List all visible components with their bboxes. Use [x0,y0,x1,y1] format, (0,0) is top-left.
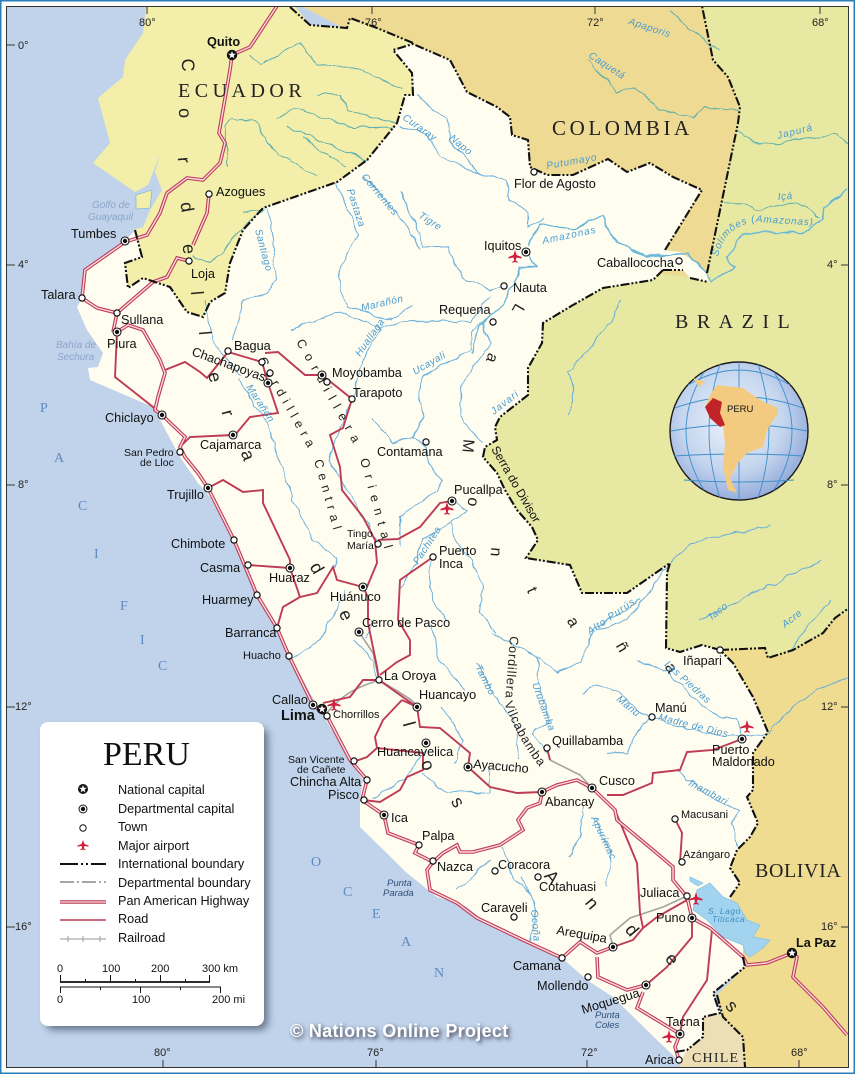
locator globe: PERU [727,404,754,415]
latitude and longitude labels: 80° [139,17,156,29]
city labels: Tacna [666,1015,701,1029]
panel: legend: Major airport [118,839,190,853]
river and gulf labels: Marañón [243,383,276,425]
city labels: Requena [439,303,491,317]
panel: legend: Railroad [118,931,165,945]
city labels: Nauta [513,281,548,295]
city labels: Tingo [347,528,373,540]
city labels: Huarmey [202,593,254,607]
ocean label: Pacific Ocean: I [140,633,145,648]
national capitals [227,50,797,958]
mountain range letters: Cordillera de los Andes: l [187,290,207,296]
city labels: Azángaro [683,849,730,861]
mountain range names: Cordillera Central [262,358,342,530]
panel: legend: National capital [118,783,205,797]
ocean label: Pacific Ocean: E [372,907,381,922]
city labels: Manú [655,701,687,715]
ocean label: Pacific Ocean [40,401,444,981]
ocean label: Pacific Ocean: C [78,499,87,514]
city labels: Tumbes [71,227,116,241]
city labels: Barranca [225,626,277,640]
city labels: Nazca [437,860,474,874]
city labels: de Cañete [297,764,346,776]
airports [328,250,754,1043]
river and gulf labels: Caquetá [586,50,627,82]
legend: scale bar: 0 [57,994,63,1006]
legend shadow [46,728,268,1030]
country names: CHILE [692,1051,739,1066]
river and gulf labels: Solimões (Amazonas) [712,214,812,256]
city labels: La Oroya [384,669,437,683]
river and gulf labels: Apurímac [588,814,618,862]
river and gulf labels: Napo [447,133,474,158]
mountain range letters: Cordillera de los Andes: A [540,866,564,888]
latitude and longitude labels: 12° [15,701,32,713]
latitude and longitude labels: 72° [581,1047,598,1059]
city labels: Lima [281,708,316,724]
city labels: Puerto [439,544,476,558]
river and gulf labels: Ucayali [411,350,448,378]
mountain range letters: La Montana: L [508,301,527,317]
river and gulf labels: Titicaca [712,914,745,924]
river and gulf labels: Curaray [400,112,439,144]
latitude and longitude labels: 16° [821,921,838,933]
panel: legend: Town [118,820,148,834]
city labels: Pisco [328,788,359,802]
river and gulf labels: S. Lago [708,906,741,916]
city labels: Arica [645,1053,675,1067]
mountain range letters: La Montana: a [482,351,501,365]
city labels: Maldonado [712,755,775,769]
ocean label: Pacific Ocean: C [158,659,167,674]
mountain range letters: Cordillera de los Andes: l [195,330,215,336]
mountain range letters: La Montana: o [463,496,482,508]
city labels: Trujillo [167,488,204,502]
mountain range letters: Cordillera de los Andes: e [335,606,357,624]
river and gulf labels: Corrientes [359,172,400,218]
mountain range letters: La Montana: a [563,614,582,630]
mountain range letters: Cordillera de los Andes: o [417,757,439,773]
latitude and longitude labels: 76° [365,17,382,29]
copyright shadow: © Nations Online Project [292,1023,510,1043]
city labels: Contamana [377,445,444,459]
city labels: Talara [41,288,76,302]
legend: scale bar: 300 km [202,963,238,975]
city labels: Palpa [422,829,455,843]
river and gulf labels: Parada [383,888,414,899]
city labels: Puerto [712,743,749,757]
city labels: Caballococha [597,256,675,270]
city labels: Huánuco [330,590,381,604]
mountain range letters: Cordillera de los Andes [174,58,743,1016]
city labels: María [347,540,374,552]
latitude and longitude labels: 8° [18,479,29,491]
mountain range names [262,340,544,767]
ocean label: Pacific Ocean: A [54,451,65,466]
mountain range letters: La Montana: a [661,660,680,676]
country names: COLOMBIA [552,116,693,140]
river and gulf labels: Putumayo [546,152,598,172]
latitude and longitude labels: 68° [812,17,829,29]
ocean label: Pacific Ocean: O [311,855,321,870]
river and gulf labels: Iaco [707,601,730,622]
city labels: Cerro de Pasco [362,616,450,630]
city labels: Cotahuasi [539,880,596,894]
river and gulf labels: Amazonas [540,225,598,247]
river and gulf labels: Içá [777,191,793,203]
lake: Titicaca [690,877,770,957]
mountain range letters: Cordillera de los Andes: o [175,108,195,118]
gulf of Guayaquil island [136,190,152,209]
mountain range letters: La Montana: n [487,547,504,557]
city labels: Quillabamba [552,734,624,748]
mountain range letters: Cordillera de los Andes: s [447,793,469,811]
latitude and longitude labels: 80° [154,1047,171,1059]
city labels: Piura [107,337,138,351]
copyright: © Nations Online Project [290,1021,508,1041]
latitude and longitude labels: 4° [827,259,838,271]
mountain range letters: Cordillera de los Andes: a [237,447,259,464]
mountain range letters: Cordillera de los Andes: e [204,370,226,384]
panel: legend: Road [118,912,148,926]
river and gulf labels: Japurá [775,122,814,142]
city labels: Camana [513,959,562,973]
latitude and longitude labels: 68° [791,1047,808,1059]
river and gulf labels: Pastaza [344,188,367,229]
country names: ECUADOR [178,80,306,102]
country: Peru [77,44,768,1062]
city labels: Chincha Alta [290,775,362,789]
city labels: Huancavelica [377,745,454,759]
latitude and longitude labels: 76° [367,1047,384,1059]
mountain range names: Cordillera Vilcabamba [506,636,544,767]
country: Chile [680,1013,745,1074]
city labels: Huacho [243,650,281,662]
locator globe [670,362,808,500]
ocean label: Pacific Ocean: P [40,401,48,416]
city labels: Callao [272,693,308,707]
river and gulf labels: Apaporis [626,16,672,40]
city labels: Chimbote [171,537,225,551]
panel: legend: Departmental boundary [118,876,251,890]
latitude and longitude labels: 16° [15,921,32,933]
city labels: La Paz [796,936,836,950]
city labels: Macusani [681,809,728,821]
river and gulf labels: Manu [614,694,642,720]
ocean label: Pacific Ocean: A [401,935,412,950]
city labels: San Pedro [124,447,174,459]
city labels: Juliaca [640,886,680,900]
legend: scale bar: 200 mi [212,994,245,1006]
city labels: Loja [191,267,216,281]
city labels: Chachapoyas [190,345,268,384]
river and gulf labels: Acre [779,608,805,631]
city labels: Chorrillos [333,709,380,721]
mountain range letters: Cordillera de los Andes: r [218,408,238,418]
country names [178,80,841,1066]
city labels: Flor de Agosto [514,177,596,191]
latitude and longitude labels: 0° [18,40,29,52]
city labels: Coracora [498,858,551,872]
mountain range letters: Cordillera de los Andes: r [174,156,194,164]
country: Bolivia [717,610,855,1074]
river and gulf labels: Santiago [252,228,274,273]
mountain range letters: Cordillera de los Andes: d [306,559,328,577]
city labels: Tarapoto [353,386,402,400]
city labels: Cajamarca [200,438,262,452]
river and gulf labels: Javari [488,389,522,418]
city labels: de Lloc [140,457,174,469]
city labels: Casma [200,561,241,575]
city labels: Azogues [216,185,265,199]
latitude and longitude labels: 8° [827,479,838,491]
river and gulf labels: Alto Purús [585,596,638,638]
city labels: Inca [439,557,464,571]
globe: Peru highlight [705,398,725,427]
river and gulf labels: Las Piedras [662,659,713,706]
mountain range letters: Cordillera de los Andes: n [581,893,603,913]
panel: legend: Departmental capital [118,802,234,816]
mountain range letters: La Montana: t [523,585,540,596]
river and gulf labels: Guayaquil [88,212,134,223]
city labels: Puno [656,911,686,925]
ocean label: Pacific Ocean: C [343,885,352,900]
city labels: Arequipa [555,923,609,946]
river and gulf labels: Pachitea [411,525,444,567]
river and gulf labels: Inambari [687,778,730,808]
ocean label: Pacific Ocean: I [94,547,99,562]
latitude and longitude labels: 72° [587,17,604,29]
city labels: Cusco [599,774,635,788]
legend: scale bar: 0 [57,963,63,975]
river and gulf labels: Ocoña [528,909,542,942]
river and gulf labels: Punta [387,878,412,889]
legend: scale bar: 200 [151,963,169,975]
country: Colombia [290,0,740,278]
country: Brazil [480,0,855,660]
country: Ecuador [93,0,413,317]
mountain range letters: Cordillera de los Andes: l [399,719,419,729]
river and gulf labels: Punta [595,1010,620,1021]
panel: legend [40,722,264,1026]
city labels: Iquitos [484,239,521,253]
mountain range names: Serra do Divisor [488,444,544,525]
mountain range letters: Cordillera de los Andes: s [721,996,743,1016]
latitude and longitude labels: 4° [18,259,29,271]
city labels: Mollendo [537,979,588,993]
mountain range letters: Cordillera de los Andes: e [179,243,199,255]
latitude and longitude labels: 12° [821,701,838,713]
city labels: Moyobamba [332,366,403,380]
panel: legend: International boundary [118,857,245,871]
river and gulf labels: Madre de Dios [657,712,729,740]
river and gulf labels: Tambo [472,663,497,698]
city labels: Caraveli [481,901,528,915]
ocean label: Pacific Ocean: F [120,599,128,614]
mountain range names: Cordillera Oriental [298,340,393,548]
departmental capitals [113,237,746,1038]
city labels: Abancay [545,795,595,809]
globe: South America [693,378,778,493]
city labels: Huaraz [269,571,310,585]
mountain range letters: Cordillera de los Andes: C [178,58,198,72]
panel: legend: PERU [103,736,190,773]
ocean label: Pacific Ocean: N [434,966,444,981]
river: Amazon [472,190,848,353]
legend: scale bar: 100 [132,994,150,1006]
river and gulf labels: Marañón [360,294,405,314]
river and gulf labels: Urubamba [529,681,557,733]
city labels: Bagua [234,339,272,353]
mountain range letters: Cordillera de los Andes: e [661,949,683,969]
city labels: Huancayo [419,688,476,702]
town markers [79,169,723,1063]
rivers [193,10,848,940]
city labels: San Vicente [288,754,345,766]
city labels: Quito [207,35,240,49]
legend: scale bar: 100 [102,963,120,975]
city labels: Ica [391,811,409,825]
river and gulf labels: Sechura [57,352,95,363]
city labels: Sullana [121,313,164,327]
mountain range letters: La Montana: ñ [612,639,631,655]
river and gulf labels: Golfo de [92,200,130,211]
mountain range letters: Cordillera de los Andes: d [176,200,198,214]
city labels: Moquegua [580,986,642,1017]
roads [115,332,742,1034]
mountain range letters: Cordillera de los Andes: d [621,920,643,940]
country names: BOLIVIA [755,860,841,882]
river and gulf labels: Huallaga [353,317,387,359]
river and gulf labels: Coles [595,1020,620,1031]
country names: BRAZIL [675,311,798,333]
mountain range letters: La Montana [458,301,680,676]
river and gulf labels: Tigre [416,210,443,233]
legend: scale bar [57,963,245,1006]
city labels: Chiclayo [105,411,154,425]
panel: legend: Pan American Highway [118,894,250,908]
city labels: Ayacucho [473,757,529,776]
mountain range letters: La Montana: M [458,439,477,453]
city labels: Iñapari [683,654,722,668]
city labels: Pucallpa [454,483,504,497]
railroad [326,632,687,947]
river and gulf labels: Bahía de [56,340,96,351]
